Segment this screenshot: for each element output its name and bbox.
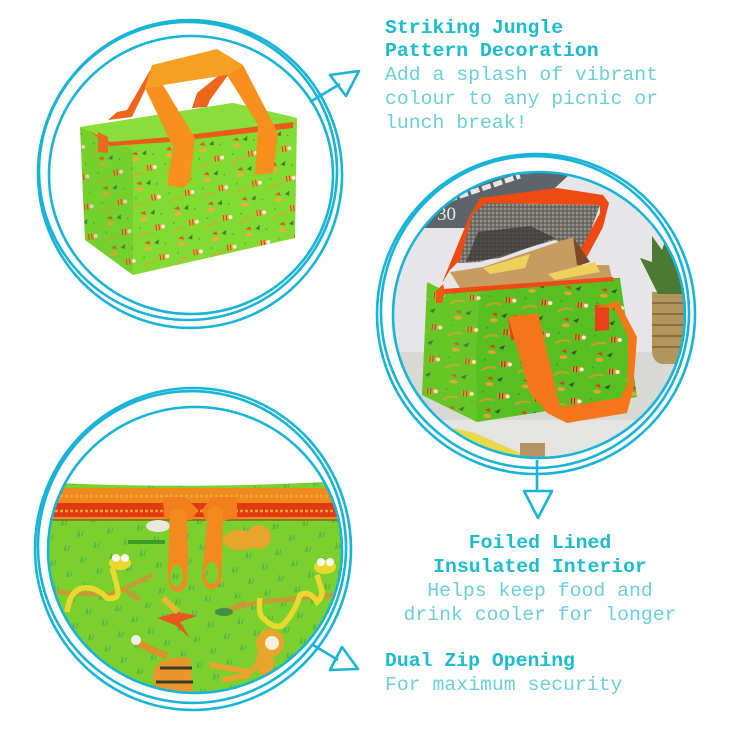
text block: foil lined caption: Insulated Interior (433, 556, 647, 578)
text block: striking jungle pattern caption: Pattern Decoration (385, 40, 599, 62)
arrow: pointing to third caption (313, 645, 358, 670)
text block: dual zip caption (385, 650, 623, 696)
photo: closed green jungle lunch bag (80, 49, 297, 275)
icon: sketched circle around bag (18, 0, 362, 348)
snakes, monkeys and tiger (57, 520, 336, 695)
text block: foil lined caption (403, 532, 677, 626)
photo: open bag with sandwich: 30 (437, 204, 456, 225)
photo: close-up of zip pulls (40, 481, 345, 700)
arrow: pointing to second caption (524, 460, 552, 518)
text block: striking jungle pattern caption: Striking Jungle (385, 17, 563, 39)
text block: foil lined caption: Foiled Lined (469, 532, 611, 554)
photo: open bag with sandwich (394, 173, 684, 457)
text block: striking jungle pattern caption: lunch break! (385, 112, 527, 134)
panel: dual zip opening (34, 386, 360, 712)
text block: dual zip caption: For maximum security (385, 674, 623, 696)
zip pull: right (202, 497, 237, 589)
text block: dual zip caption: Dual Zip Opening (385, 650, 575, 672)
text block: striking jungle pattern caption: Add a splash of vibrant (385, 64, 658, 86)
panel: foil lined interior (376, 152, 696, 520)
text block: foil lined caption: drink cooler for longer (403, 604, 677, 626)
zip pull: left (163, 497, 198, 592)
text block: striking jungle pattern caption (385, 17, 658, 134)
text block: foil lined caption: Helps keep food and (427, 580, 653, 602)
arrow: pointing to first caption (310, 71, 359, 102)
text block: striking jungle pattern caption: colour to any picnic or (385, 88, 658, 110)
icon: sketched circle around zip (18, 371, 366, 723)
panel: striking jungle pattern (18, 0, 362, 348)
icon: sketched circle around photo (361, 136, 709, 488)
